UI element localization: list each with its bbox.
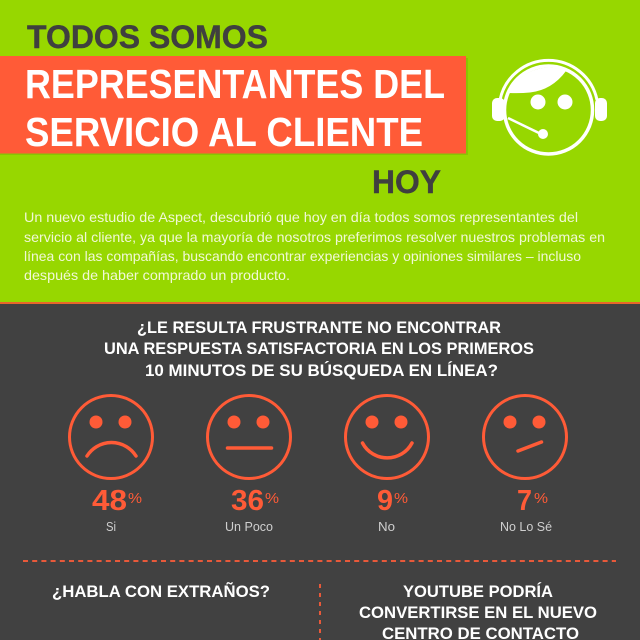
stat: 9 percent no: %	[394, 490, 408, 507]
banner: main title: SERVICIO AL CLIENTE	[25, 109, 423, 155]
stat: 7 percent no lo se: %	[534, 490, 548, 507]
panel: green header	[0, 0, 640, 304]
icon: happy face	[346, 396, 428, 478]
heading: youtube contact center: YOUTUBE PODRÍA	[403, 582, 553, 601]
stat: 7 percent no lo se: 7	[517, 485, 532, 517]
heading: survey question	[104, 318, 534, 380]
icon: neutral face	[208, 396, 290, 478]
stat: 9 percent no: No	[378, 519, 395, 534]
text block: intro paragraph: Un nuevo estudio de Aspect, descubrió que hoy en día todos somos representantes del	[24, 209, 578, 225]
stat: 48 percent si	[92, 485, 142, 534]
heading: survey question: 10 MINUTOS DE SU BÚSQUEDA EN LÍNEA?	[145, 361, 498, 380]
stat: 7 percent no lo se: No Lo Sé	[500, 519, 552, 534]
heading: hoy: HOY	[372, 164, 441, 200]
stat: 48 percent si: %	[128, 490, 142, 507]
text block: intro paragraph: servicio al cliente, ya que la mayoría de nosotros preferimos resolver nuestros problemas en	[24, 229, 605, 245]
stat: 36 percent un poco: Un Poco	[225, 519, 273, 534]
heading: survey question: UNA RESPUESTA SATISFACTORIA EN LOS PRIMEROS	[104, 339, 534, 358]
stat: 36 percent un poco	[225, 485, 279, 534]
stat: 48 percent si: 48	[92, 485, 127, 517]
stat: 36 percent un poco: 36	[231, 485, 264, 517]
stat: 36 percent un poco: %	[265, 490, 279, 507]
icon: unsure face	[484, 396, 566, 478]
stat: 9 percent no	[377, 485, 408, 534]
stat: 7 percent no lo se	[500, 485, 552, 534]
heading: survey question: ¿LE RESULTA FRUSTRANTE NO ENCONTRAR	[137, 318, 501, 337]
text block: intro paragraph	[24, 209, 605, 283]
heading: youtube contact center	[359, 582, 597, 640]
panel: dark survey section	[0, 304, 640, 640]
heading: habla con extraños: ¿HABLA CON EXTRAÑOS?	[52, 581, 270, 601]
text block: intro paragraph: después de haber comprado un producto.	[24, 267, 290, 283]
stat: 48 percent si: Si	[106, 519, 116, 534]
heading: todos somos: TODOS SOMOS	[27, 19, 268, 55]
text block: intro paragraph: línea con las compañías, buscando encontrar experiencias y opiniones similares – incluso	[24, 248, 581, 264]
heading: youtube contact center: CONVERTIRSE EN EL NUEVO	[359, 603, 597, 622]
banner: main title	[0, 56, 468, 155]
icon: agent with headset	[492, 60, 607, 154]
stat: 9 percent no: 9	[377, 485, 393, 517]
icon: sad face	[70, 396, 152, 478]
banner: main title: REPRESENTANTES DEL	[25, 61, 445, 107]
